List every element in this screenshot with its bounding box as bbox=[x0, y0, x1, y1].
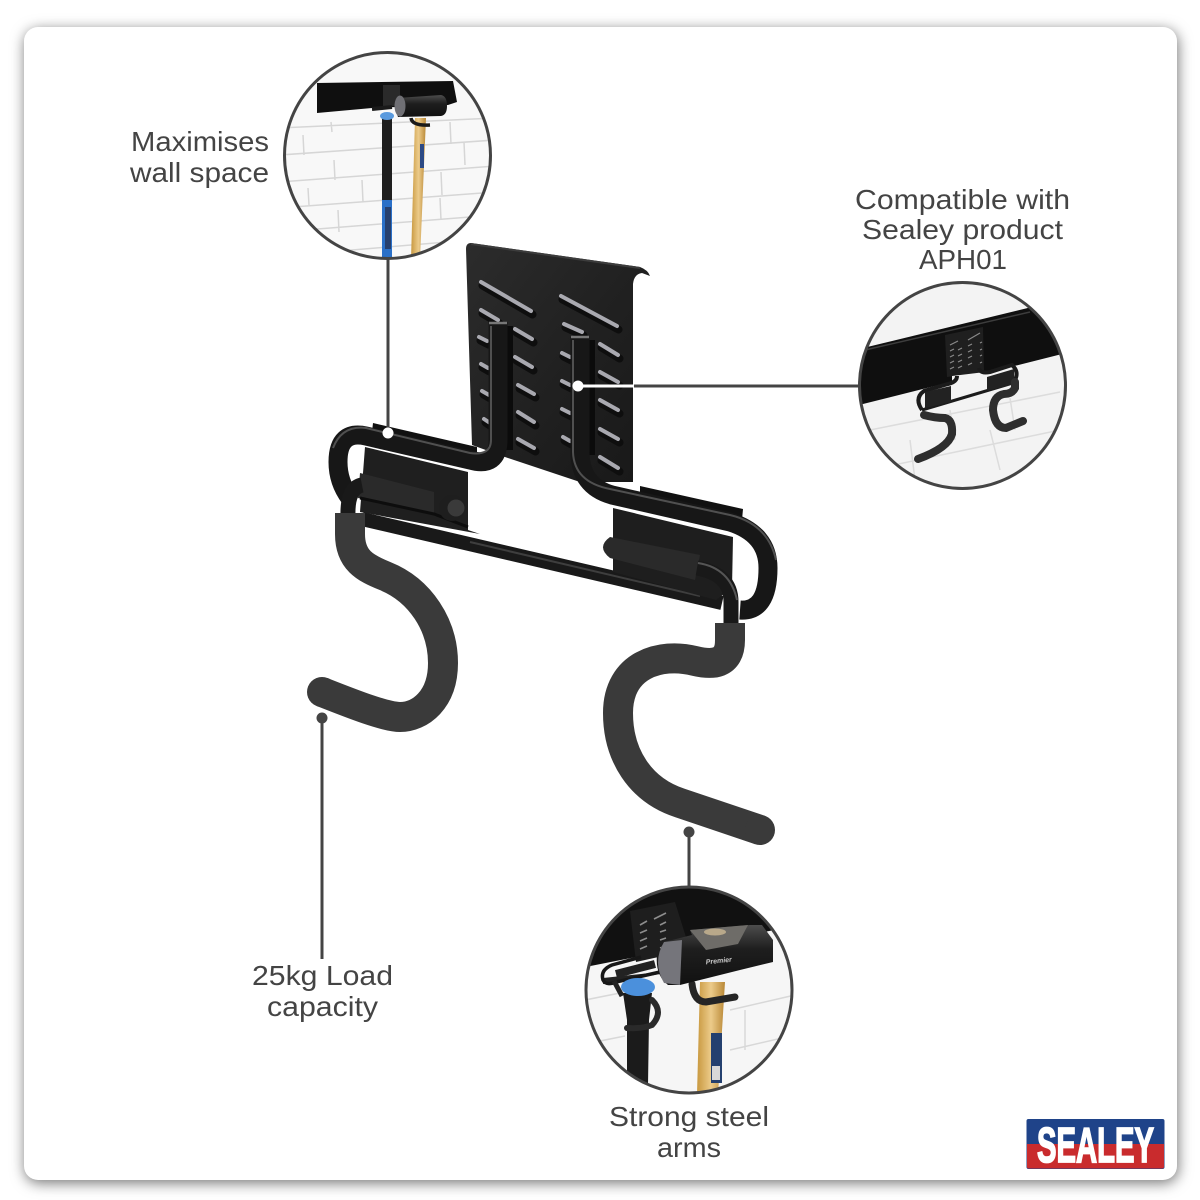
callout photo: tools hanging on wall bbox=[280, 50, 495, 262]
callout photo: hammer on hook: Premier bbox=[706, 957, 733, 966]
leader line: maximises wall space bbox=[382, 258, 394, 438]
label: Maximises wall space: Maximises bbox=[131, 126, 269, 157]
leader line: 25kg load capacity bbox=[316, 712, 328, 959]
label: 25kg Load capacity: capacity bbox=[267, 991, 378, 1022]
tube shadows on plate bbox=[509, 326, 591, 455]
right arm bbox=[697, 568, 731, 626]
long cross bar bbox=[362, 519, 722, 603]
label: Strong steel arms bbox=[609, 1101, 769, 1163]
callout photo: bracket mounted on rail bbox=[855, 280, 1070, 492]
callout photo: hammer on hook bbox=[580, 880, 800, 1097]
label: Strong steel arms: Strong steel bbox=[609, 1101, 769, 1132]
right clamp bbox=[603, 508, 733, 600]
right tube loop bbox=[571, 337, 776, 610]
label: Compatible with Sealey product APH01 bbox=[855, 184, 1070, 275]
rear rail edge bbox=[372, 423, 743, 520]
label: 25kg Load capacity: 25kg Load bbox=[252, 960, 393, 991]
label: 25kg Load capacity bbox=[252, 960, 393, 1022]
leader line: compatible with APH01 bbox=[572, 380, 860, 392]
back plate with slots bbox=[466, 243, 650, 482]
label: Strong steel arms: arms bbox=[657, 1132, 721, 1163]
label: Compatible with Sealey product APH01: Compatible with bbox=[855, 184, 1070, 215]
label: Maximises wall space bbox=[129, 126, 269, 188]
left arm bbox=[348, 485, 362, 517]
left clamp bbox=[358, 447, 480, 534]
label: Compatible with Sealey product APH01: Sealey product bbox=[862, 214, 1063, 245]
left foam hook bbox=[307, 513, 443, 717]
product: wall bracket with hooks bbox=[307, 243, 776, 845]
label: Compatible with Sealey product APH01: APH01 bbox=[919, 244, 1007, 275]
right foam hook bbox=[618, 623, 775, 845]
left tube loop bbox=[333, 322, 507, 498]
leader line: strong steel arms bbox=[684, 826, 694, 888]
label: Maximises wall space: wall space bbox=[129, 157, 269, 188]
